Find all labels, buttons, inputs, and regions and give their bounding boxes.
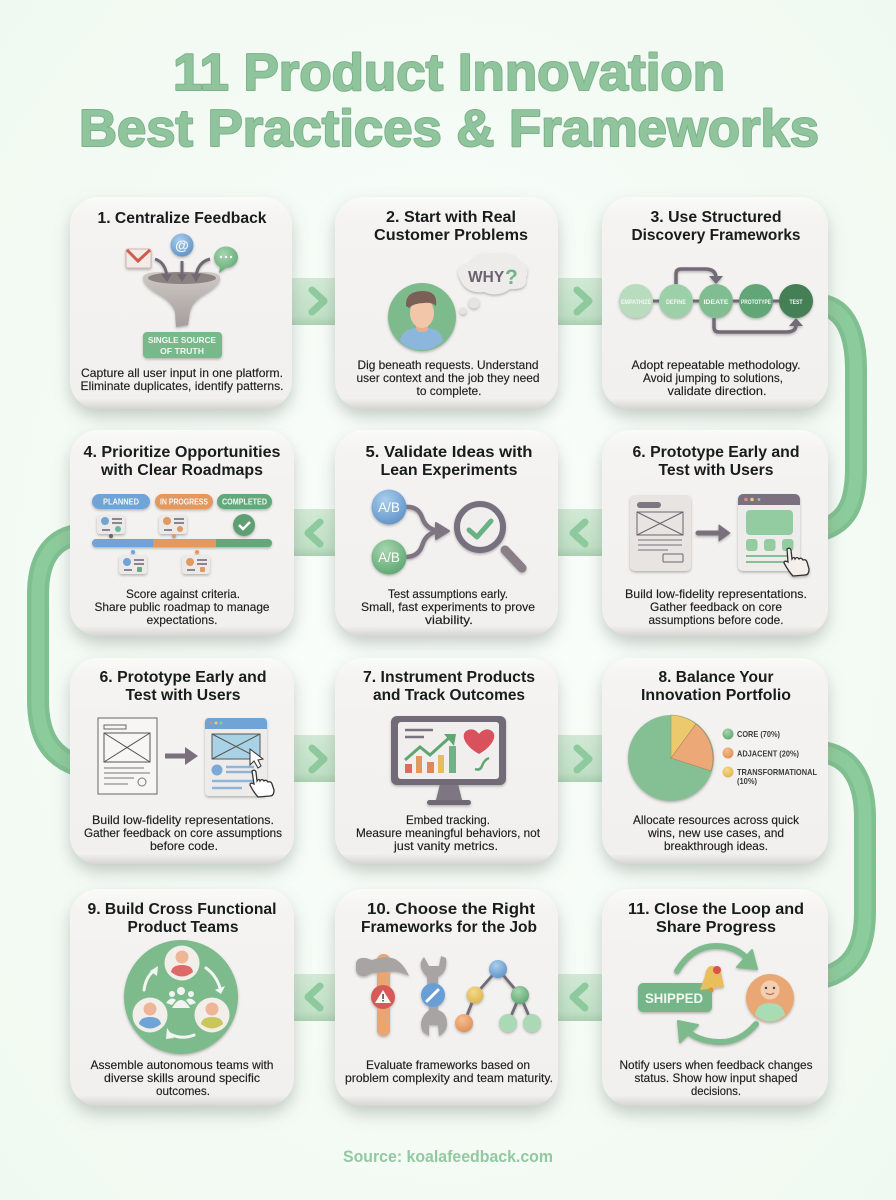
heading 4 — [84, 444, 281, 479]
text 7: Measure meaningful behaviors, not — [356, 826, 541, 840]
text 5: Test assumptions early. — [388, 587, 508, 601]
icon: shipped loop: SHIPPED — [645, 990, 703, 1006]
text 5 — [361, 587, 535, 627]
label: single source of truth — [143, 332, 222, 358]
heading 10 — [361, 901, 537, 936]
icon: analytics monitor — [391, 716, 506, 805]
pie chart — [628, 715, 714, 801]
heading 7: and Track Outcomes — [373, 687, 525, 704]
text 6: Gather feedback on core — [650, 600, 782, 614]
heading 5 — [366, 444, 532, 479]
heading 6 repeat: 6. Prototype Early and — [100, 669, 266, 686]
panel: 9 Cross Functional Teams — [70, 889, 294, 1106]
icon: team circle — [124, 940, 238, 1054]
icon: sketch to screen — [98, 718, 274, 797]
text 11: Notify users when feedback changes — [620, 1058, 812, 1072]
text 4: Score against criteria. — [126, 587, 240, 601]
text 7: Embed tracking. — [406, 813, 490, 827]
icon: funnel with inputs — [126, 234, 238, 327]
title — [79, 44, 819, 158]
title: Best Practices & Frameworks — [79, 100, 819, 158]
text 4 — [94, 587, 270, 627]
panel: 6 Prototype Early (right) — [602, 430, 828, 636]
icon: shipped loop — [638, 946, 794, 1042]
legend: ADJACENT (20%) — [737, 748, 799, 758]
heading 10: Frameworks for the Job — [361, 919, 537, 936]
heading 6 repeat — [100, 669, 266, 704]
text 6 repeat: before code. — [150, 839, 218, 853]
roadmap diagram: IN PROGRESS — [160, 496, 208, 506]
text 10: problem complexity and team maturity. — [345, 1071, 553, 1085]
source line: Source: koalafeedback.com — [343, 1148, 553, 1166]
diagram: discovery process: EMPATHIZE — [621, 299, 652, 306]
heading 4: with Clear Roadmaps — [100, 462, 263, 479]
text 6 repeat: Build low-fidelity representations. — [92, 813, 274, 827]
heading 1: 1. Centralize Feedback — [98, 210, 267, 227]
panel: 3 Use Structured Discovery Frameworks — [602, 197, 828, 409]
icon: thought cloud why: ? — [505, 266, 518, 289]
text 5: viability. — [425, 613, 473, 627]
arrow: card 1 to 2 — [285, 278, 345, 325]
icon: customer avatar — [388, 283, 456, 351]
heading 11 — [628, 901, 804, 936]
text 11 — [620, 1058, 812, 1098]
icon: A/B test magnifier: A/B — [378, 550, 400, 565]
icon: A/B test magnifier: A/B — [378, 500, 400, 515]
panel: 6 Prototype Early (left) — [70, 658, 294, 864]
text 1 — [80, 366, 284, 393]
text 3 — [632, 358, 800, 398]
text 2: to complete. — [416, 384, 482, 398]
heading 5: 5. Validate Ideas with — [366, 444, 532, 461]
text 7 — [356, 813, 541, 853]
text 2: user context and the job they need — [356, 371, 540, 385]
text 9: outcomes. — [156, 1084, 210, 1098]
legend — [722, 728, 817, 786]
text 9 — [90, 1058, 274, 1098]
legend: TRANSFORMATIONAL — [737, 767, 817, 777]
icon: thought cloud why: WHY — [468, 269, 505, 286]
icon: hammer — [356, 954, 409, 1036]
icon: decision tree — [455, 960, 541, 1032]
text 5: Small, fast experiments to prove — [361, 600, 535, 614]
text 3: Avoid jumping to solutions, — [643, 371, 783, 385]
heading 9: Product Teams — [128, 919, 239, 936]
text 4: Share public roadmap to manage — [94, 600, 270, 614]
heading 2: 2. Start with Real — [386, 209, 516, 226]
heading 9: 9. Build Cross Functional — [88, 901, 276, 918]
text 1: Eliminate duplicates, identify patterns. — [80, 379, 284, 393]
diagram: discovery process — [619, 269, 813, 332]
text 8 — [633, 813, 800, 853]
text 8: Allocate resources across quick — [633, 813, 800, 827]
title: 11 Product Innovation — [173, 44, 725, 102]
heading 3: Discovery Frameworks — [632, 227, 801, 244]
text 11: decisions. — [691, 1084, 741, 1098]
arrow: card 6b to 7 — [285, 735, 345, 782]
connector: row 2 to row 3 curve — [38, 535, 76, 765]
legend: CORE (70%) — [737, 729, 780, 739]
heading 6 repeat: Test with Users — [126, 687, 241, 704]
text 1: Capture all user input in one platform. — [81, 366, 283, 380]
heading 3: 3. Use Structured — [650, 209, 782, 226]
arrow: card 6 to 5 — [550, 509, 610, 556]
text 8: breakthrough ideas. — [664, 839, 768, 853]
label: single source of truth: SINGLE SOURCE — [148, 335, 216, 345]
text 10: Evaluate frameworks based on — [366, 1058, 530, 1072]
diagram: discovery process: DEFINE — [666, 299, 687, 306]
panel: 2 Start with Real Customer Problems — [335, 197, 558, 409]
panel: 11 Close the Loop — [602, 889, 828, 1106]
heading 9 — [88, 901, 276, 936]
arrow: card 7 to 8 — [550, 735, 610, 782]
arrow: card 11 to 10 — [550, 974, 610, 1021]
panel: 4 Prioritize Opportunities — [70, 430, 294, 636]
connector: row 1 to row 2 curve — [822, 305, 856, 530]
heading 2: Customer Problems — [374, 227, 528, 244]
roadmap diagram: COMPLETED — [222, 496, 267, 506]
panel: 8 Balance Portfolio — [602, 658, 828, 864]
heading 6 — [632, 444, 800, 479]
legend: (10%) — [737, 776, 757, 786]
diagram: discovery process: IDEATE — [704, 299, 729, 306]
heading 7: 7. Instrument Products — [363, 669, 535, 686]
panel: 1 Centralize Feedback — [70, 197, 292, 409]
panel: 10 Choose the Right Frameworks — [335, 889, 558, 1106]
diagram: discovery process: PROTOTYPE — [741, 299, 771, 306]
arrow: card 2 to 3 — [550, 278, 610, 325]
panel: 5 Validate Ideas — [335, 430, 558, 636]
text 7: just vanity metrics. — [393, 839, 498, 853]
icon: wrench — [421, 956, 447, 1036]
icon: A/B test magnifier — [372, 490, 522, 574]
roadmap diagram — [92, 494, 272, 574]
panel: 7 Instrument Products — [335, 658, 558, 864]
diagram: discovery process: TEST — [790, 299, 803, 306]
icon: funnel with inputs: @ — [175, 237, 189, 253]
heading 6: Test with Users — [658, 462, 774, 479]
text 10 — [345, 1058, 553, 1085]
heading 3 — [632, 209, 801, 244]
heading 7 — [363, 669, 535, 704]
text 6 repeat — [84, 813, 282, 853]
text 3: Adopt repeatable methodology. — [632, 358, 800, 372]
icon: wireframe to prototype — [630, 494, 809, 576]
heading 8 — [641, 669, 791, 704]
text 6 repeat: Gather feedback on core assumptions — [84, 826, 282, 840]
text 6: assumptions before code. — [648, 613, 784, 627]
text 9: Assemble autonomous teams with — [90, 1058, 274, 1072]
text 11: status. Show how input shaped — [634, 1071, 798, 1085]
text 8: wins, new use cases, and — [647, 826, 784, 840]
text 3: validate direction. — [668, 384, 766, 398]
text 4: expectations. — [146, 613, 218, 627]
arrow: card 5 to 4 — [285, 509, 345, 556]
text 6: Build low-fidelity representations. — [625, 587, 807, 601]
text 2: Dig beneath requests. Understand — [358, 358, 538, 372]
arrow: card 10 to 9 — [285, 974, 345, 1021]
text 2 — [356, 358, 540, 398]
roadmap diagram: PLANNED — [103, 496, 139, 506]
heading 11: 11. Close the Loop and — [628, 901, 804, 918]
heading 4: 4. Prioritize Opportunities — [84, 444, 281, 461]
heading 10: 10. Choose the Right — [367, 901, 536, 918]
text 9: diverse skills around specific — [104, 1071, 260, 1085]
label: single source of truth: OF TRUTH — [160, 346, 204, 356]
heading 11: Share Progress — [656, 919, 776, 936]
heading 5: Lean Experiments — [380, 462, 518, 479]
heading 2 — [374, 209, 528, 244]
heading 6: 6. Prototype Early and — [632, 444, 800, 461]
heading 8: 8. Balance Your — [658, 669, 774, 686]
connector: row 3 to row 4 curve — [822, 752, 865, 978]
text 6 — [625, 587, 807, 627]
icon: thought cloud why — [458, 253, 527, 314]
heading 8: Innovation Portfolio — [641, 687, 791, 704]
